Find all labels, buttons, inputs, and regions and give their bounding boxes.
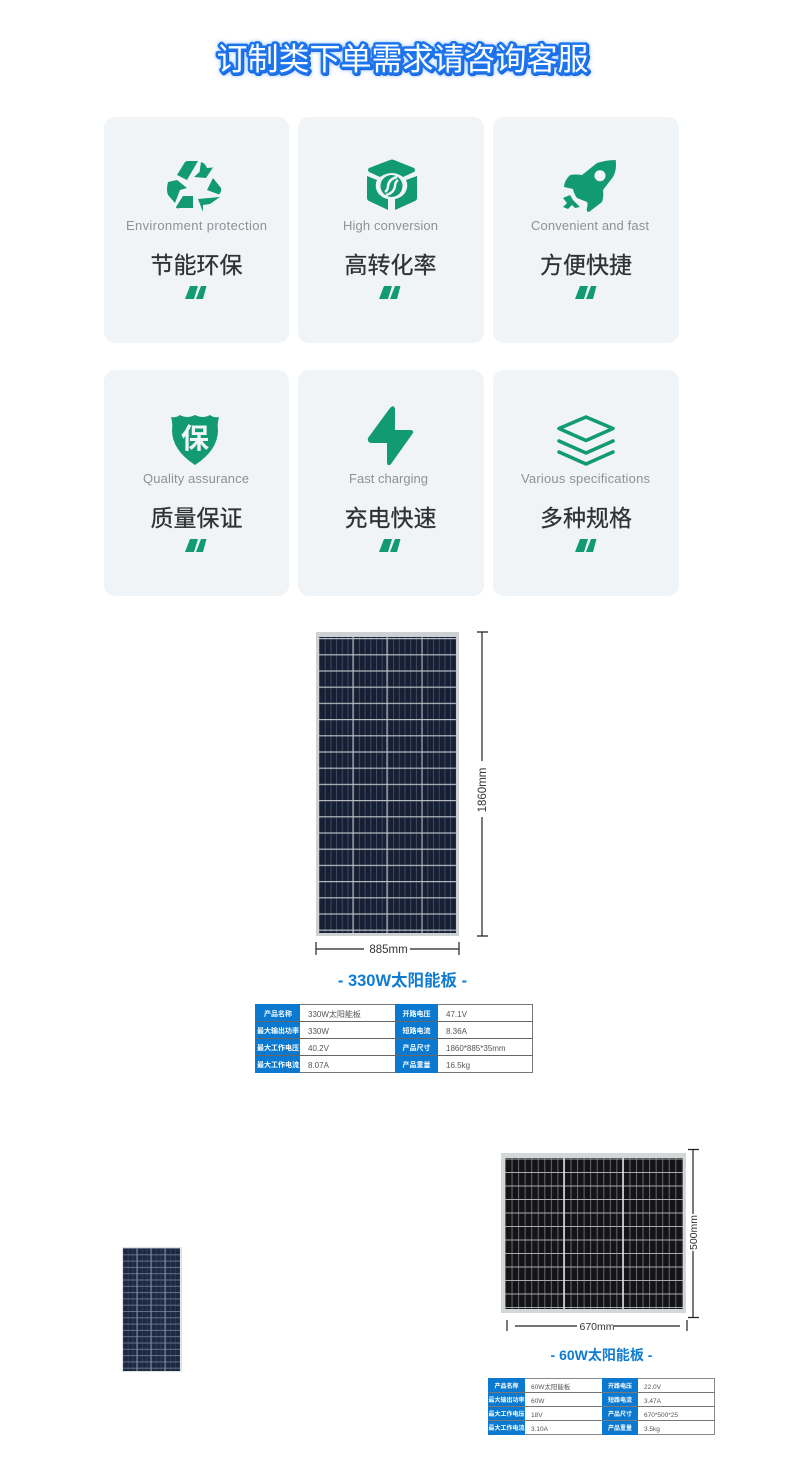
spec table: 330W: 8.07A xyxy=(308,1061,330,1070)
quote mark xyxy=(379,286,400,299)
spec table: 60W: 最大输出功率 xyxy=(488,1396,525,1404)
dimension: 500mm xyxy=(688,1149,700,1318)
panel: convenient and fast xyxy=(493,117,679,343)
spec table: 330W: 产品尺寸 xyxy=(402,1043,430,1052)
spec table: 330W: 最大工作电压 xyxy=(257,1043,299,1052)
english label: High conversion xyxy=(343,218,438,233)
solar panel 330W xyxy=(316,632,459,936)
spec table: 330W: 产品名称 xyxy=(264,1009,292,1018)
spec table: 330W: 40.2V xyxy=(308,1044,330,1053)
dimension: 885mm: 885mm xyxy=(369,944,408,956)
chinese heading: 节能环保 xyxy=(150,252,242,278)
spec table: 330W xyxy=(255,1004,533,1073)
spec table: 330W: 47.1V xyxy=(446,1010,468,1019)
spec table: 330W: 产品重量 xyxy=(402,1060,430,1069)
chinese heading: 方便快捷 xyxy=(540,252,632,278)
spec table: 60W: 60W xyxy=(531,1398,545,1405)
quote mark xyxy=(379,539,400,552)
chinese heading: 高转化率 xyxy=(344,252,436,278)
spec table: 60W: 670*500*25 xyxy=(644,1412,678,1419)
spec table: 330W: 开路电压 xyxy=(402,1009,430,1018)
spec table: 60W: 产品名称 xyxy=(494,1382,519,1390)
spec table: 330W: 短路电流 xyxy=(402,1026,430,1035)
dimension: 500mm: 500mm xyxy=(688,1215,700,1250)
heading: 330W: - 330W太阳能板 - xyxy=(338,971,467,990)
panel: various specifications xyxy=(493,370,679,596)
chinese heading: 充电快速 xyxy=(344,505,436,531)
quote mark xyxy=(575,286,596,299)
panel: quality assurance xyxy=(104,370,289,596)
spec table: 60W: 3.5kg xyxy=(644,1426,660,1433)
spec table: 60W xyxy=(488,1378,715,1435)
icon: rocket xyxy=(563,160,616,212)
heading: 60W: - 60W太阳能板 - xyxy=(551,1347,653,1363)
panel: high conversion xyxy=(298,117,484,343)
spec table: 60W: 短路电流 xyxy=(608,1396,632,1404)
dimension: 670mm: 670mm xyxy=(579,1321,615,1333)
spec table: 60W: 产品尺寸 xyxy=(608,1410,632,1418)
spec table: 60W: 3.47A xyxy=(644,1398,662,1405)
spec table: 60W: 60W太阳能板 xyxy=(531,1382,571,1391)
chinese heading: 质量保证 xyxy=(150,505,242,531)
spec table: 330W: 330W太阳能板 xyxy=(308,1009,361,1019)
spec table: 60W: 开路电压 xyxy=(608,1382,632,1390)
solar panel 60W xyxy=(501,1153,686,1313)
english label: Convenient and fast xyxy=(531,218,649,233)
title: 订制类下单需求请咨询客服 xyxy=(216,42,588,77)
spec table: 330W: 330W xyxy=(308,1027,329,1036)
panel: fast charging xyxy=(298,370,484,596)
dimension: 1860mm: 1860mm xyxy=(477,768,489,812)
spec table: 330W: 最大输出功率 xyxy=(257,1026,299,1035)
english label: Fast charging xyxy=(349,471,428,486)
chinese heading: 多种规格 xyxy=(540,505,632,531)
spec table: 330W: 16.5kg xyxy=(446,1061,470,1070)
quote mark xyxy=(575,539,596,552)
icon: conversion hexagon xyxy=(367,160,417,210)
quote mark xyxy=(185,539,206,552)
icon: recycle xyxy=(167,161,221,212)
english label: Environment protection xyxy=(126,218,267,233)
panel: environment protection xyxy=(104,117,289,343)
spec table: 60W: 18V xyxy=(531,1412,543,1419)
icon: layers xyxy=(559,417,613,464)
spec table: 60W: 22.0V xyxy=(644,1384,662,1391)
dimension: 1860mm xyxy=(477,632,489,936)
spec table: 60W: 最大工作电压 xyxy=(488,1410,525,1418)
spec table: 330W: 最大工作电流 xyxy=(257,1060,299,1069)
spec table: 330W: 8.36A xyxy=(446,1027,468,1036)
dimension: 670mm xyxy=(507,1320,687,1333)
english label: Quality assurance xyxy=(143,471,249,486)
icon: lightning bolt xyxy=(368,406,413,465)
english label: Various specifications xyxy=(521,471,650,486)
spec table: 60W: 最大工作电流 xyxy=(488,1424,525,1432)
dimension: 885mm xyxy=(316,942,459,956)
icon: shield: 保 xyxy=(181,423,209,454)
spec table: 60W: 产品重量 xyxy=(608,1424,632,1432)
spec table: 60W: 3.10A xyxy=(531,1426,549,1433)
spec table: 330W: 1860*885*35mm xyxy=(446,1044,506,1053)
icon: shield xyxy=(171,415,219,465)
quote mark xyxy=(185,286,206,299)
solar panel small xyxy=(122,1247,182,1372)
